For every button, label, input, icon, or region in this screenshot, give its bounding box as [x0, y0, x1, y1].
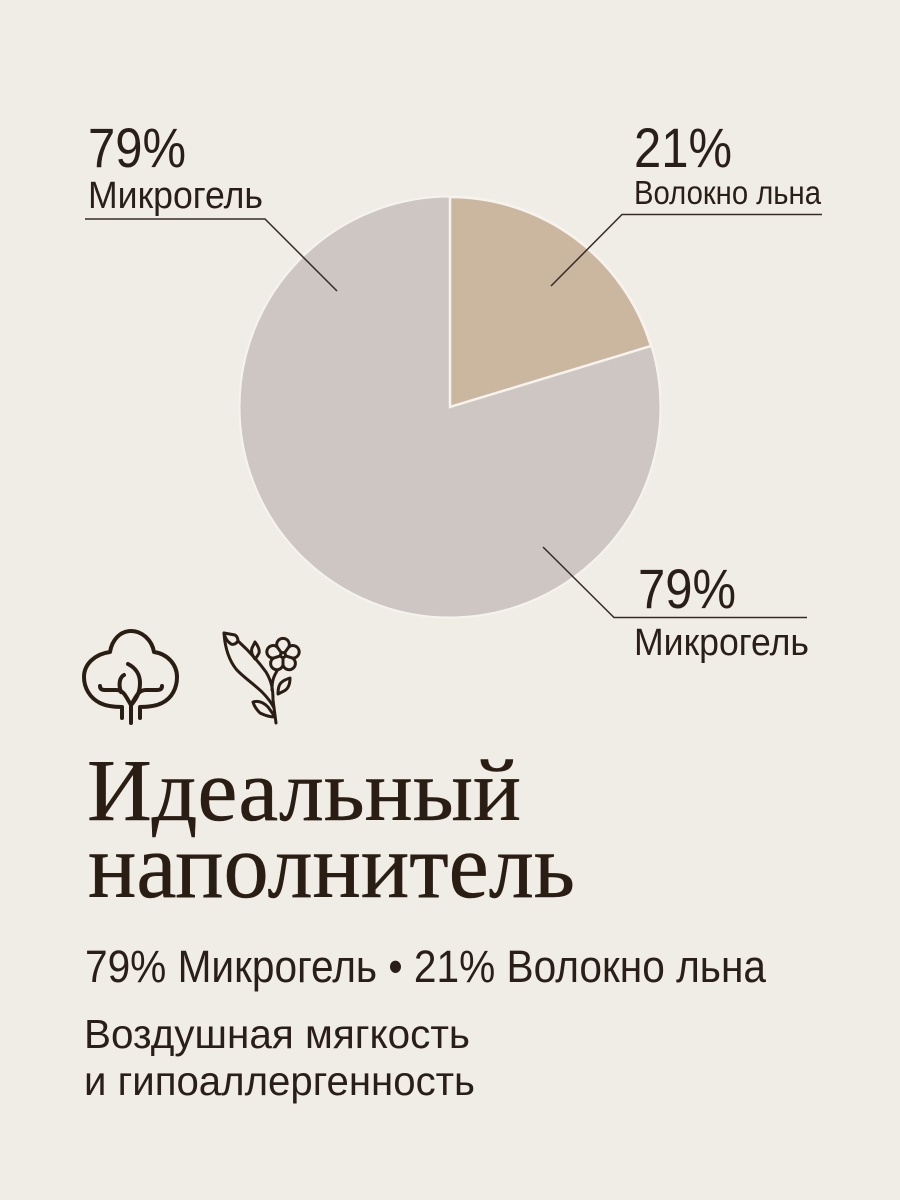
title: Идеальный — [87, 743, 521, 840]
callout: 21% top right — [551, 116, 822, 286]
description text: Воздушная мягкость — [84, 1011, 470, 1057]
callout: 79% bottom right: Микрогель — [634, 622, 809, 664]
icon: flax flower — [224, 633, 299, 723]
icon: cotton — [84, 631, 177, 723]
callout: 79% top left: Микрогель — [88, 175, 263, 217]
callout: 21% top right: 21% — [634, 116, 732, 179]
description text: и гипоаллергенность — [84, 1058, 475, 1104]
callout: 79% bottom right — [543, 547, 809, 664]
title: наполнитель — [88, 815, 575, 917]
callout: 21% top right: Волокно льна — [634, 174, 822, 211]
callout: 79% top left: 79% — [88, 116, 186, 179]
callout: 79% top left — [85, 116, 337, 291]
composition line: 79% Микрогель • 21% Волокно льна — [85, 941, 767, 992]
pie chart — [240, 196, 660, 618]
description text — [84, 1011, 475, 1104]
callout: 79% bottom right: 79% — [638, 557, 736, 620]
title — [87, 743, 575, 917]
